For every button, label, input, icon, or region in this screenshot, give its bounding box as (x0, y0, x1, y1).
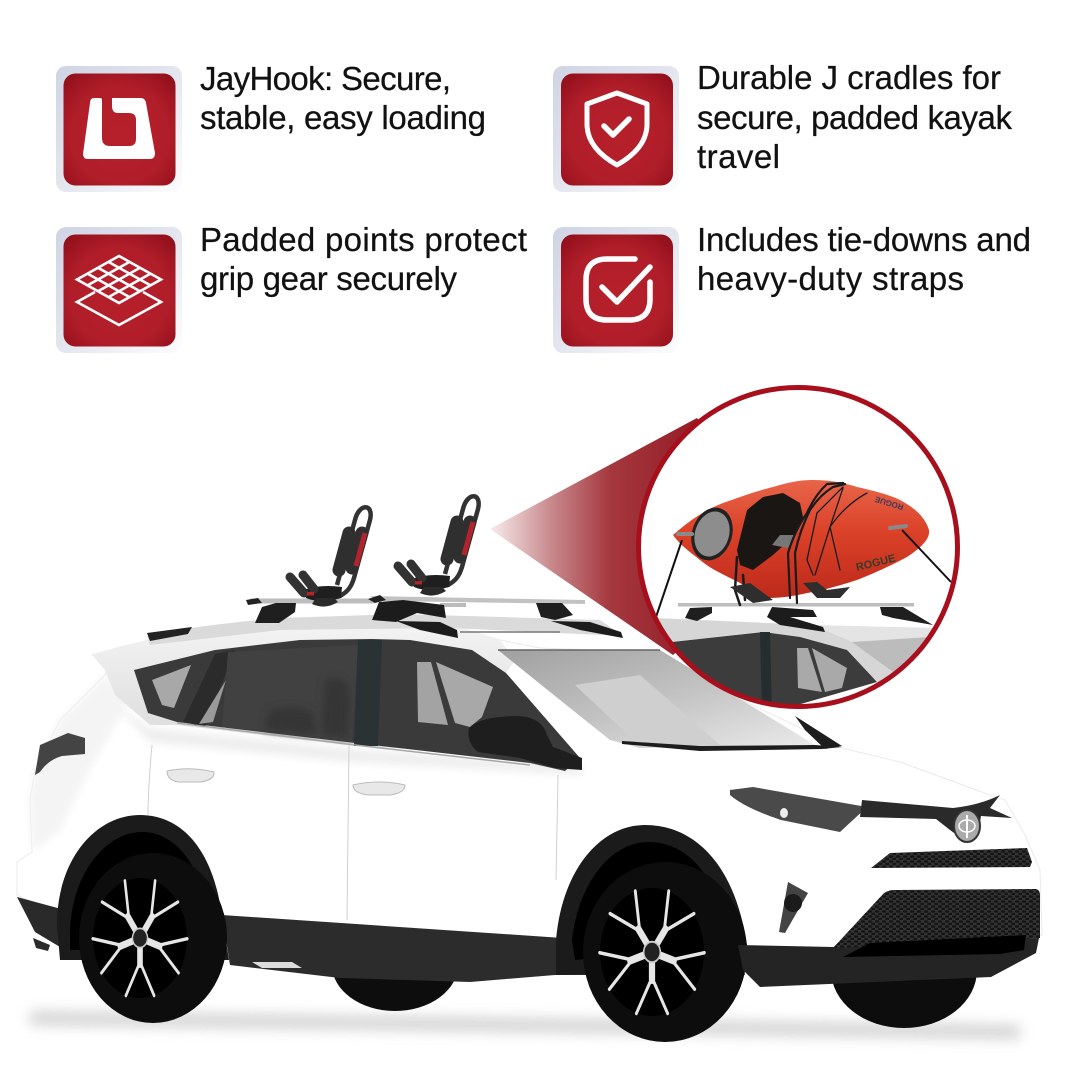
upper grille (871, 848, 1032, 868)
kayak logo: ROGUE (873, 494, 905, 512)
feature: padded points (56, 221, 527, 353)
icon tile: check box (553, 227, 679, 353)
hood strip (860, 795, 1012, 841)
text: tie-downs (697, 221, 1031, 297)
text: JayHook: stable, easy loading (200, 99, 486, 136)
front wheel (583, 862, 747, 1042)
rear bumper lower (17, 897, 65, 951)
kayak cockpit (737, 493, 803, 570)
rear wheel (79, 853, 227, 1023)
text: JayHook: JayHook: Secure, (200, 60, 451, 97)
kayak straps (735, 483, 867, 605)
kayak hatch (691, 508, 733, 560)
fog lamp (779, 882, 808, 933)
feature: tie-downs and straps (553, 221, 1031, 353)
tie-down lines (656, 530, 951, 617)
ground shadow (30, 1012, 1020, 1038)
roof rails (147, 614, 623, 645)
text: padded points: grip gear securely (200, 260, 458, 297)
door handles (167, 769, 405, 795)
roof cross bars (246, 595, 585, 623)
kayak logo: ROGUE (855, 553, 897, 574)
text: durable cradles: secure, padded kayak (697, 99, 1012, 136)
front lower bumper (738, 938, 1039, 987)
icon tile: shield (553, 66, 679, 192)
icon tile: layers (56, 227, 182, 353)
text: padded points (200, 221, 527, 297)
kayak handles (678, 526, 906, 534)
door seams (148, 745, 558, 920)
kayak logo (855, 494, 905, 574)
text: padded points: Padded points protect (200, 221, 527, 258)
zoom circle (638, 388, 958, 712)
sill shading (115, 705, 582, 775)
text: durable cradles: Durable J cradles for (697, 59, 1001, 96)
zoom cone (490, 418, 800, 655)
rear shading (30, 675, 130, 852)
inset kayak (673, 480, 929, 605)
inset car roof (658, 618, 932, 704)
feature: JayHook secure loading (56, 60, 486, 192)
car (17, 496, 1042, 1042)
J cradle right (398, 496, 479, 596)
windshield (498, 650, 815, 748)
side mirror (468, 716, 582, 770)
side windows (134, 639, 580, 771)
feature: durable J cradles (553, 59, 1012, 192)
text: tie-downs: heavy-duty straps (697, 260, 964, 297)
rear wheel arch (57, 815, 229, 960)
text: JayHook (200, 60, 486, 136)
roof panel (92, 621, 580, 758)
lower cladding (222, 915, 745, 982)
headlight (730, 787, 867, 832)
toyota emblem (954, 810, 980, 842)
text: tie-downs: Includes tie-downs and (697, 221, 1031, 258)
car body (17, 621, 1042, 960)
text: durable cradles: travel (697, 138, 780, 175)
far wheels (332, 912, 977, 1028)
tail light (35, 733, 85, 775)
lower grille (833, 889, 1040, 957)
text: durable cradles (697, 59, 1012, 175)
inset rack (678, 603, 933, 632)
front wheel arch (556, 825, 747, 975)
icon tile: hook (56, 66, 182, 192)
J cradle left (290, 507, 371, 607)
windshield wiper and cowl (622, 716, 842, 751)
cradles under kayak (730, 582, 850, 603)
